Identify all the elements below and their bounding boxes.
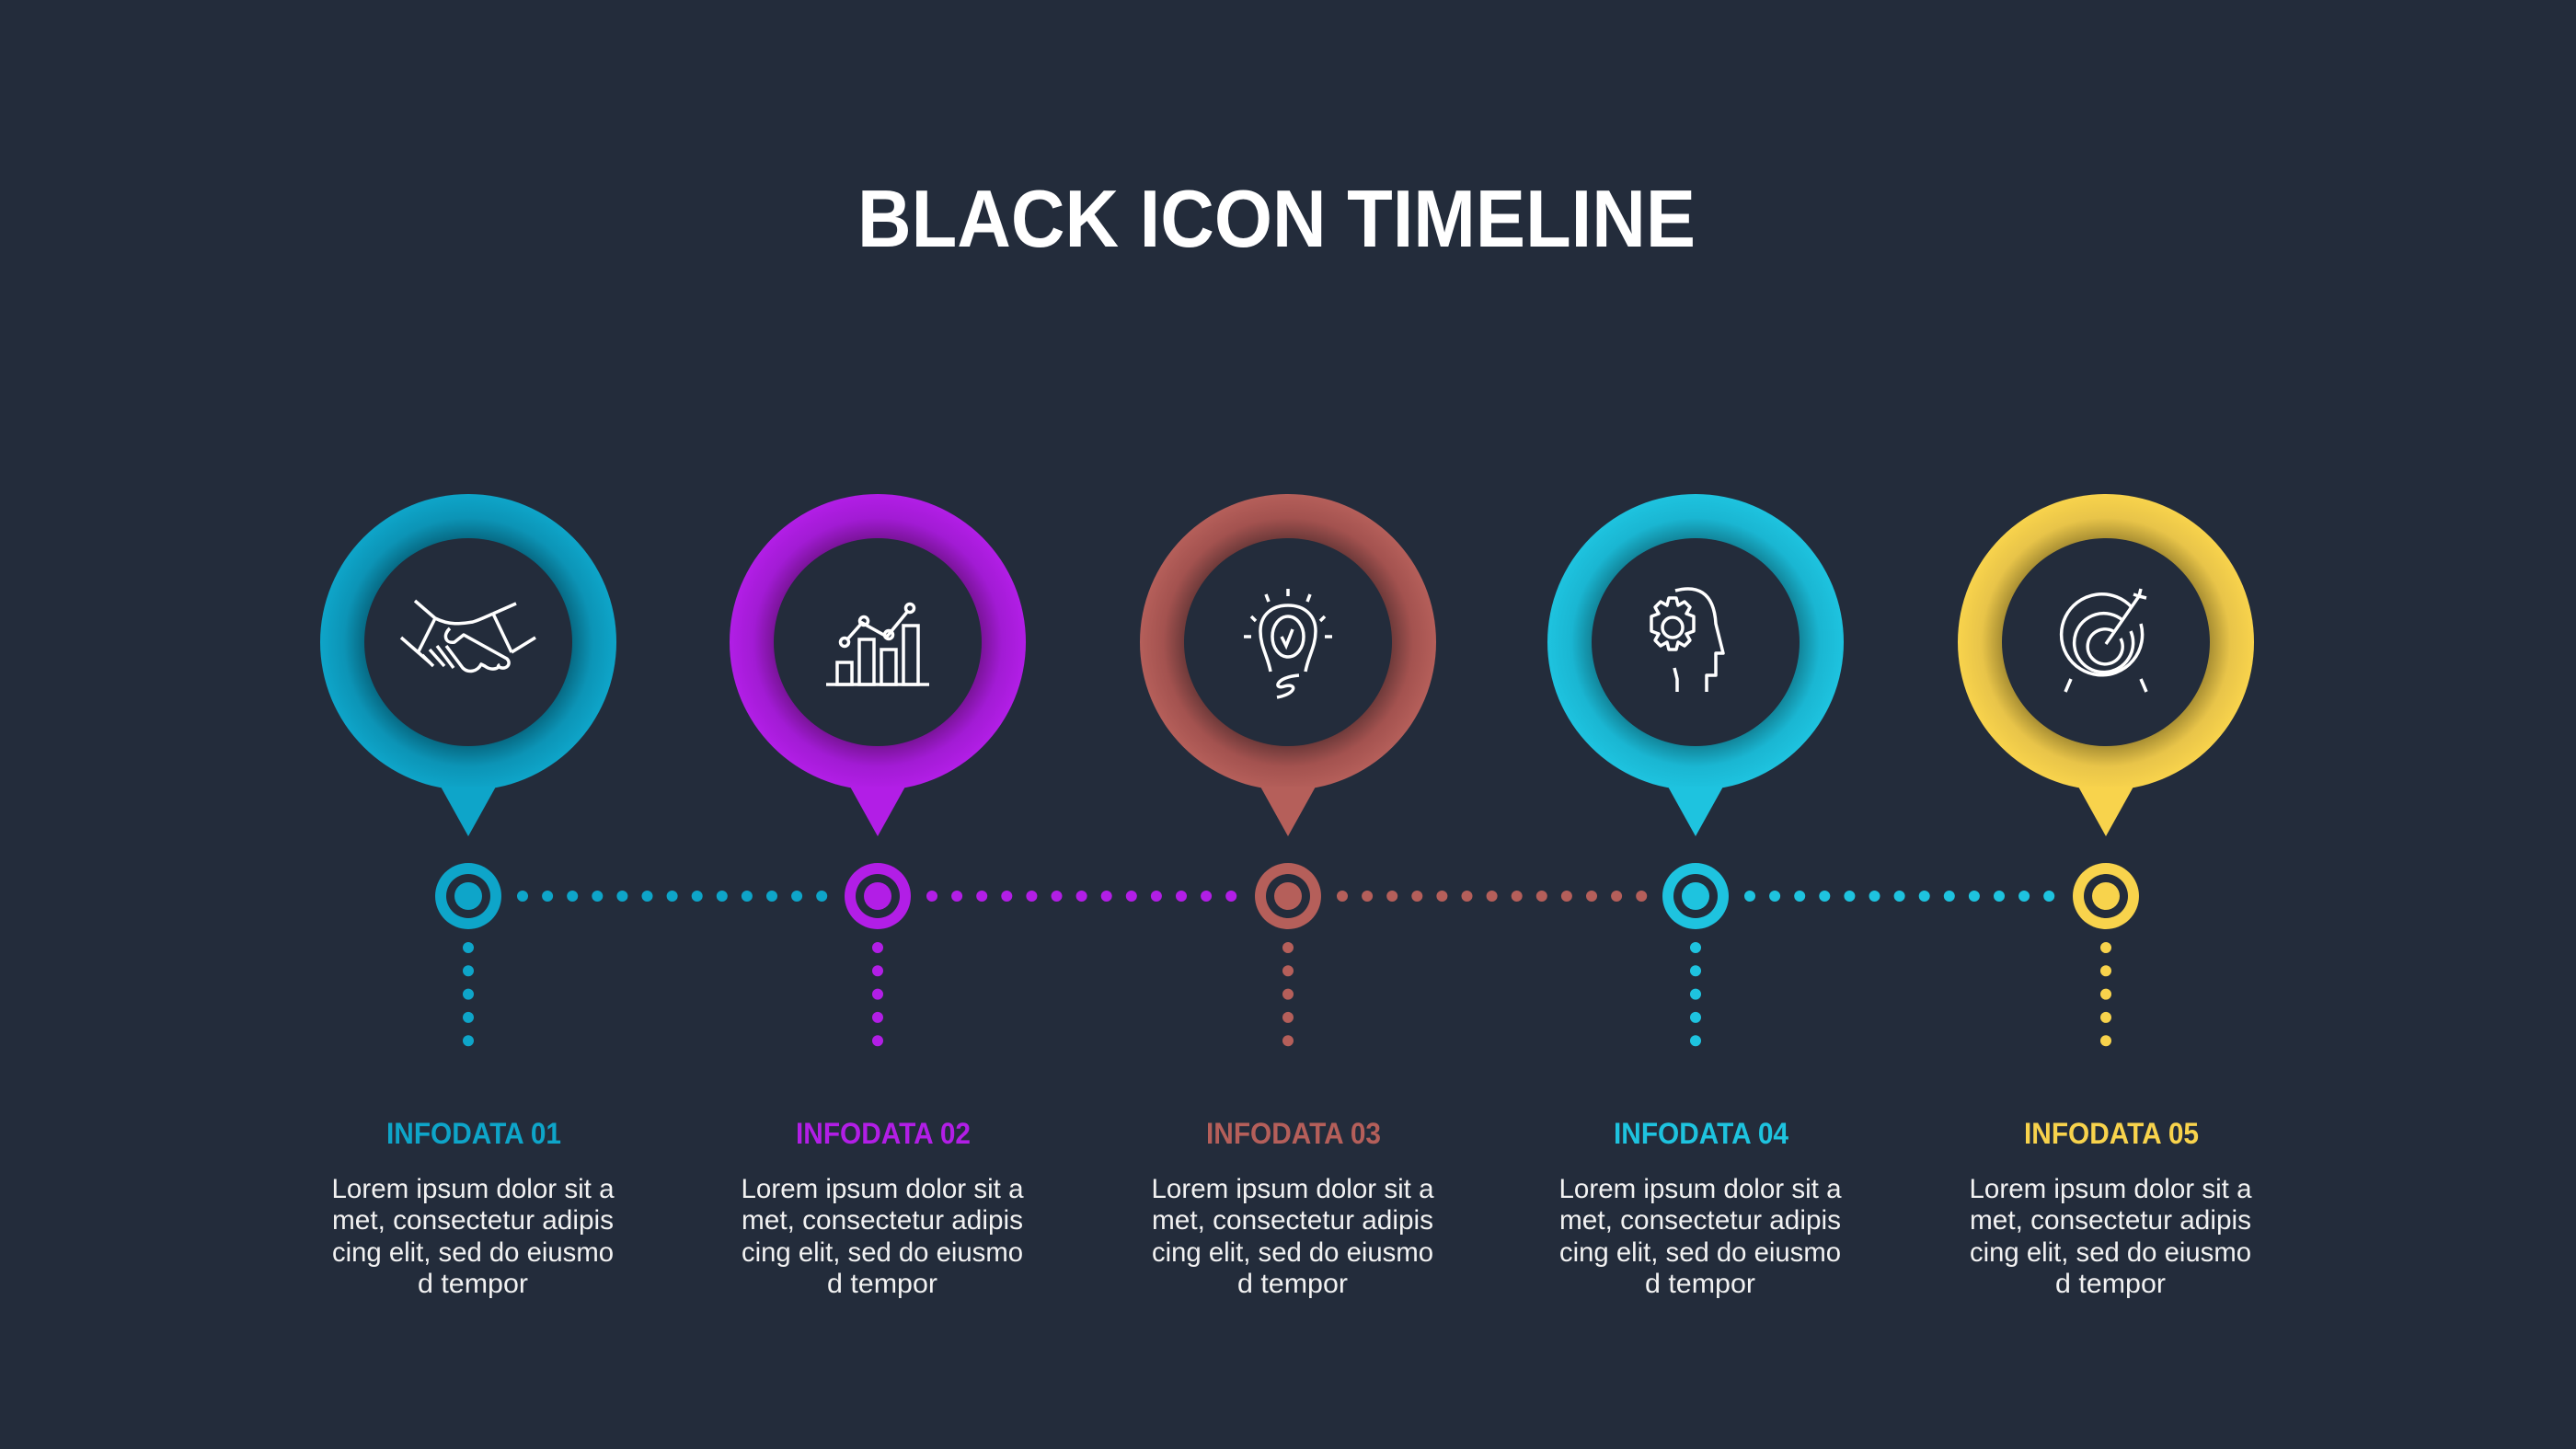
vertical dots 1 [463,948,474,1041]
pin 5 [1958,494,2254,836]
body 5: Lorem ipsum dolor sit a [1969,1174,2252,1204]
icon: head with gear [1651,589,1723,692]
step 5 [1958,494,2254,1299]
body 2: d tempor [827,1269,937,1299]
body 1: cing elit, sed do eiusmo [332,1237,614,1268]
heading 2: INFODATA 02 [796,1117,971,1150]
vertical dots 2 [872,948,883,1041]
body 4: cing elit, sed do eiusmo [1559,1237,1841,1268]
node 1 [435,863,501,929]
body 2: cing elit, sed do eiusmo [742,1237,1023,1268]
vertical dots 5 [2100,948,2111,1041]
body 3: d tempor [1237,1269,1348,1299]
body 1: Lorem ipsum dolor sit a [331,1174,615,1204]
icon: target [2062,589,2146,692]
body 1 [331,1174,615,1299]
node 4 [1662,863,1729,929]
heading 5: INFODATA 05 [2024,1117,2199,1150]
body 4 [1558,1174,1842,1299]
body 3: cing elit, sed do eiusmo [1152,1237,1433,1268]
pin 2 [730,494,1026,836]
body 3: Lorem ipsum dolor sit a [1152,1174,1434,1204]
body 2 [742,1174,1024,1299]
pin 1 [320,494,616,836]
pin 3 [1140,494,1436,836]
node 5 [2073,863,2139,929]
pin 4 [1547,494,1844,836]
body 5 [1969,1174,2252,1299]
icon: handshake [401,601,535,671]
step 1 [320,494,616,1299]
body 3: met, consectetur adipis [1152,1205,1433,1236]
icon: bar chart [826,604,929,684]
vertical dots 4 [1690,948,1701,1041]
icon: light bulb [1244,589,1332,697]
title: BLACK ICON TIMELINE [857,173,1696,264]
body 5: cing elit, sed do eiusmo [1970,1237,2251,1268]
body 4: Lorem ipsum dolor sit a [1558,1174,1842,1204]
heading 3: INFODATA 03 [1206,1117,1381,1150]
body 3 [1152,1174,1434,1299]
step 3 [1140,494,1436,1299]
node 3 [1255,863,1321,929]
heading 1: INFODATA 01 [386,1117,561,1150]
step 2 [730,494,1026,1299]
body 5: d tempor [2055,1269,2166,1299]
step 4 [1547,494,1844,1299]
connector dots: horizontal [523,891,2055,902]
node 2 [845,863,911,929]
body 1: d tempor [418,1269,528,1299]
body 4: met, consectetur adipis [1559,1205,1841,1236]
body 4: d tempor [1645,1269,1755,1299]
body 5: met, consectetur adipis [1970,1205,2251,1236]
vertical dots 3 [1282,948,1294,1041]
heading 4: INFODATA 04 [1614,1117,1788,1150]
body 2: met, consectetur adipis [742,1205,1023,1236]
body 2: Lorem ipsum dolor sit a [742,1174,1024,1204]
body 1: met, consectetur adipis [332,1205,614,1236]
